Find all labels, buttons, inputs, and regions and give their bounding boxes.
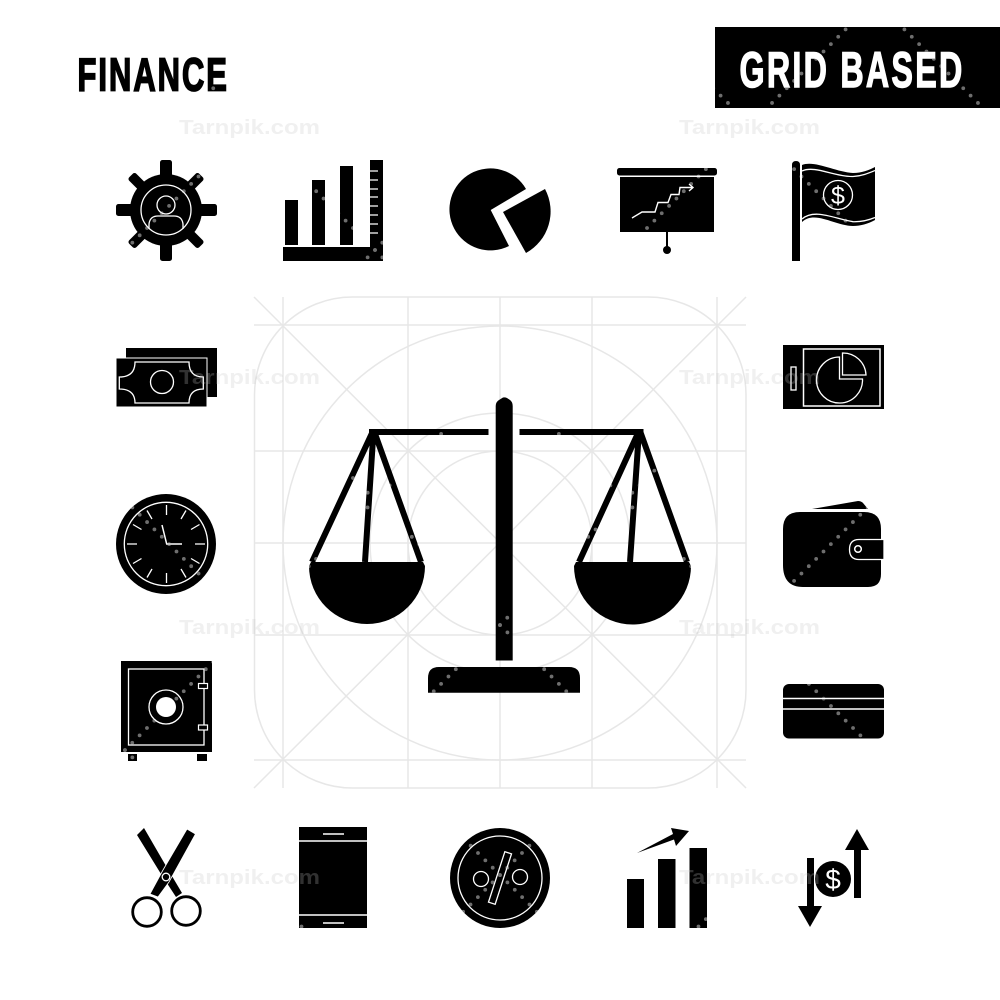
icon: dollar flag	[792, 161, 875, 261]
watermark text: Tarnpik.com	[679, 367, 820, 389]
banner: Grid Based: GRID BASED	[740, 42, 965, 98]
watermark text: Tarnpik.com	[679, 617, 820, 639]
icon: smartphone	[299, 827, 367, 928]
watermark text: Tarnpik.com	[179, 367, 320, 389]
watermark text	[179, 117, 820, 889]
watermark text: Tarnpik.com	[179, 617, 320, 639]
icon: pie chart	[449, 168, 551, 253]
icon: safe	[121, 661, 212, 761]
icon: wall clock	[116, 494, 216, 594]
icon: scissors	[133, 828, 200, 926]
icon: balance scale	[309, 397, 691, 693]
watermark text: Tarnpik.com	[179, 117, 320, 139]
icon: growth bars with arrow	[627, 828, 707, 928]
icon: dollar exchange arrows	[798, 829, 869, 927]
icon: credit card	[783, 684, 884, 738]
icon: percent badge	[450, 828, 550, 928]
icon: dollar exchange arrows: $	[825, 864, 841, 895]
construction grid behind the central icon	[254, 297, 746, 788]
icon: dollar flag: $	[831, 182, 845, 210]
icon: gear with person	[116, 160, 217, 261]
watermark text: Tarnpik.com	[679, 867, 820, 889]
banner: Grid Based	[715, 27, 1000, 108]
watermark text: Tarnpik.com	[679, 117, 820, 139]
icon: wallet	[783, 501, 884, 587]
icon: banknotes	[116, 348, 217, 407]
icon: bar chart with ruler	[283, 160, 383, 261]
watermark text: Tarnpik.com	[179, 867, 320, 889]
icon: presentation board with rising arrow	[617, 168, 717, 254]
title: Finance: FINANCE	[78, 51, 229, 101]
icon: tablet with pie chart	[783, 345, 884, 409]
